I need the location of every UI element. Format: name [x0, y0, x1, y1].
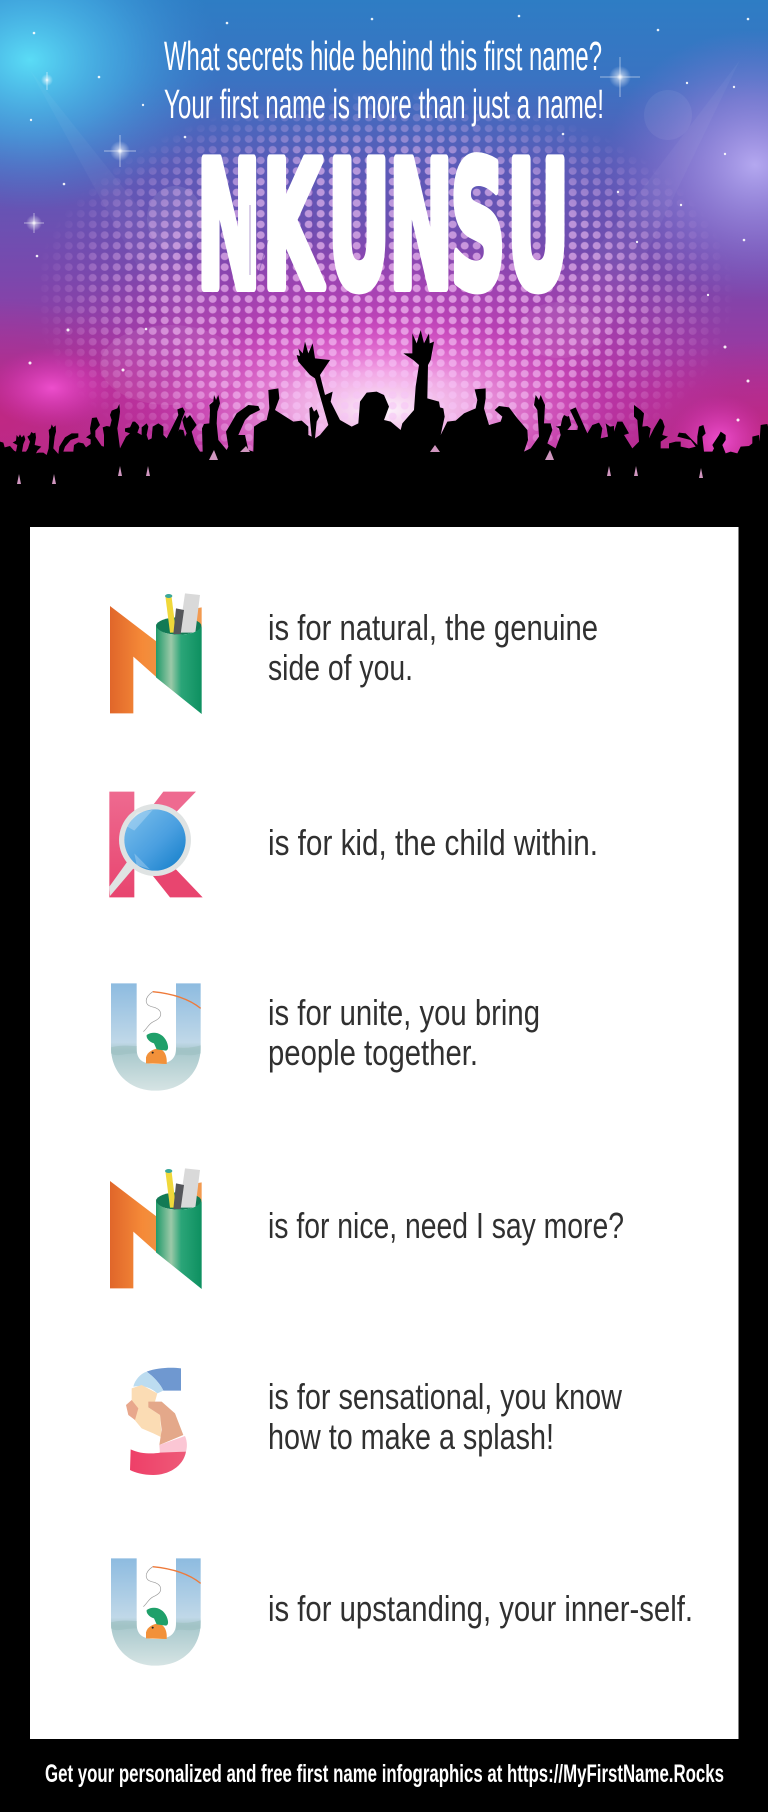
text: natural	[268, 607, 598, 688]
text: unite: people together.	[268, 1032, 478, 1073]
row 3: letter U	[111, 983, 540, 1091]
header background panel	[0, 0, 768, 455]
crowd silhouette	[0, 330, 768, 527]
text: unite	[268, 992, 540, 1073]
icon: letter N with pencil cup	[110, 593, 202, 714]
text: sensational	[268, 1376, 623, 1457]
heading: intro lines	[164, 33, 604, 127]
text: sensational: how to make a splash!	[268, 1416, 554, 1457]
row 6: letter U	[111, 1558, 693, 1666]
row 1: letter N	[110, 593, 598, 714]
row 2: letter K	[109, 792, 598, 897]
text: kid: is for kid, the child within.	[268, 822, 598, 863]
icon: letter K with magnifier	[109, 792, 203, 897]
text: unite: is for unite, you bring	[268, 992, 540, 1033]
text: natural: is for natural, the genuine	[268, 607, 598, 648]
text: natural: side of you.	[268, 647, 413, 688]
row 4: letter N	[110, 1168, 624, 1289]
text: sensational: is for sensational, you know	[268, 1376, 623, 1417]
icon: letter U with fishing scene	[111, 983, 201, 1091]
icon: letter U with fishing scene	[111, 1558, 201, 1666]
title: name NKUNSU: NKUNSU	[197, 125, 569, 328]
row 5: letter S	[126, 1368, 623, 1475]
icon: letter S with shaking hands	[126, 1368, 187, 1475]
text: nice: is for nice, need I say more?	[268, 1205, 624, 1246]
white content panel	[30, 527, 738, 1739]
icon: letter N with pencil cup	[110, 1168, 202, 1289]
